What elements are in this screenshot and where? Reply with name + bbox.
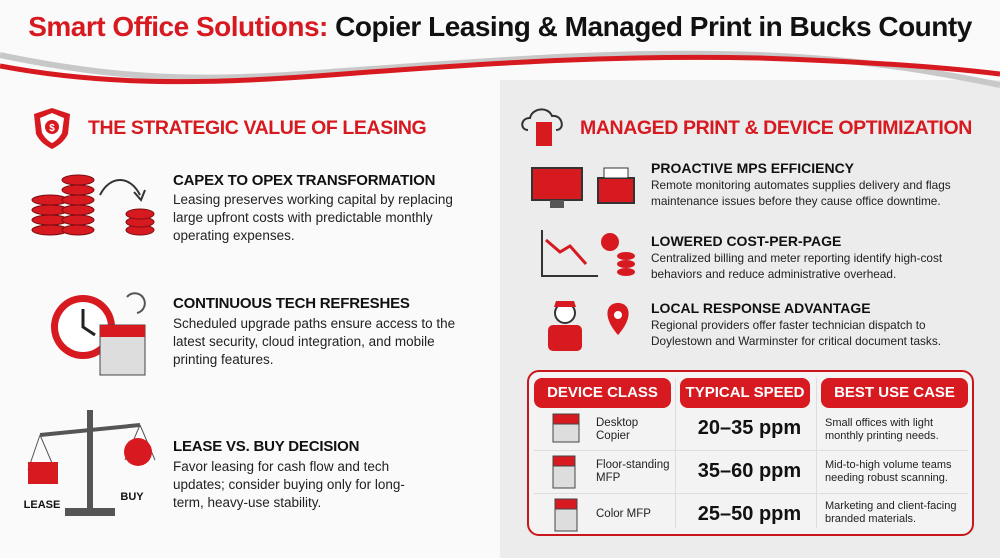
icon: shield [34,108,70,149]
item: refresh [51,292,455,376]
row: floor-standing: 35–60 ppm [698,460,801,482]
body: Scheduled upgrade paths ensure access to the latest security, cloud integration, and mobile printing features. [173,316,455,367]
icon: scale: BUY [120,491,144,503]
icon: monitor printer [531,167,635,208]
title: LEASE VS. BUY DECISION [173,438,359,455]
row: color mfp: Marketing and client-facing [825,500,956,512]
title: Smart Office Solutions: Copier Leasing & Managed Print in Bucks County [28,11,972,42]
body: updates; consider buying only for long- [173,477,405,492]
icon: scale: LEASE [24,499,60,511]
row: desktop copier: Desktop [596,417,638,429]
row: floor-standing: MFP [596,472,620,484]
header pills [534,378,671,408]
icon: scale [24,410,156,516]
body [173,459,405,510]
icon: cloud doc [521,108,563,146]
table: device comparison: TYPICAL SPEED [686,384,804,401]
body: Leasing preserves working capital by replacing large upfront costs with predictable monthly operating expenses. [173,192,453,243]
title: CAPEX TO OPEX TRANSFORMATION [173,172,435,189]
body: Favor leasing for cash flow and tech [173,459,389,474]
body: Remote monitoring automates supplies delivery and flags maintenance issues before they cause office downtime. [651,178,951,208]
row: desktop copier: Small offices with light [825,417,933,429]
item: cost per page [541,230,942,281]
heading: THE STRATEGIC VALUE OF LEASING [88,117,426,139]
icon: shield: $ [49,123,55,134]
heading: MANAGED PRINT & DEVICE OPTIMIZATION [580,117,972,139]
title: LOCAL RESPONSE ADVANTAGE [651,300,871,316]
item: local response [548,300,941,351]
title: PROACTIVE MPS EFFICIENCY [651,160,854,176]
item: MPS [531,160,951,208]
icon: clock and copier [51,292,146,376]
row: floor-standing: Mid-to-high volume teams [825,459,952,471]
body: Centralized billing and meter reporting identify high-cost behaviors and reduce administrative overhead. [651,251,942,281]
row: floor-standing [552,456,952,488]
panel: left heading [34,108,426,149]
panel: right heading [521,108,972,146]
icon: chart coins [541,230,635,277]
icon: technician pin [548,301,629,351]
row: desktop copier: Copier [596,430,630,442]
row: color mfp [554,498,956,532]
row: desktop copier [552,414,939,442]
item: lease vs buy [24,410,405,516]
title: CONTINUOUS TECH REFRESHES [173,295,410,312]
row: desktop copier: monthly printing needs. [825,430,939,442]
row: floor-standing: needing robust scanning. [825,472,948,484]
body: term, heavy-use stability. [173,495,321,510]
table: device comparison: BEST USE CASE [834,384,955,401]
row: floor-standing: Floor-standing [596,459,670,471]
title: LOWERED COST-PER-PAGE [651,233,841,249]
header pills: DEVICE CLASS [547,384,658,401]
body: Regional providers offer faster technician dispatch to Doylestown and Warminster for critical document tasks. [651,318,941,348]
row: color mfp: 25–50 ppm [698,503,801,525]
table: device comparison [527,370,974,536]
icon: coins [32,174,154,236]
row: color mfp: branded materials. [825,513,916,525]
item: capex [32,172,453,243]
swoosh [0,50,1000,88]
right panel background [500,80,1000,558]
row: desktop copier: 20–35 ppm [698,417,801,439]
row: color mfp: Color MFP [596,508,651,520]
